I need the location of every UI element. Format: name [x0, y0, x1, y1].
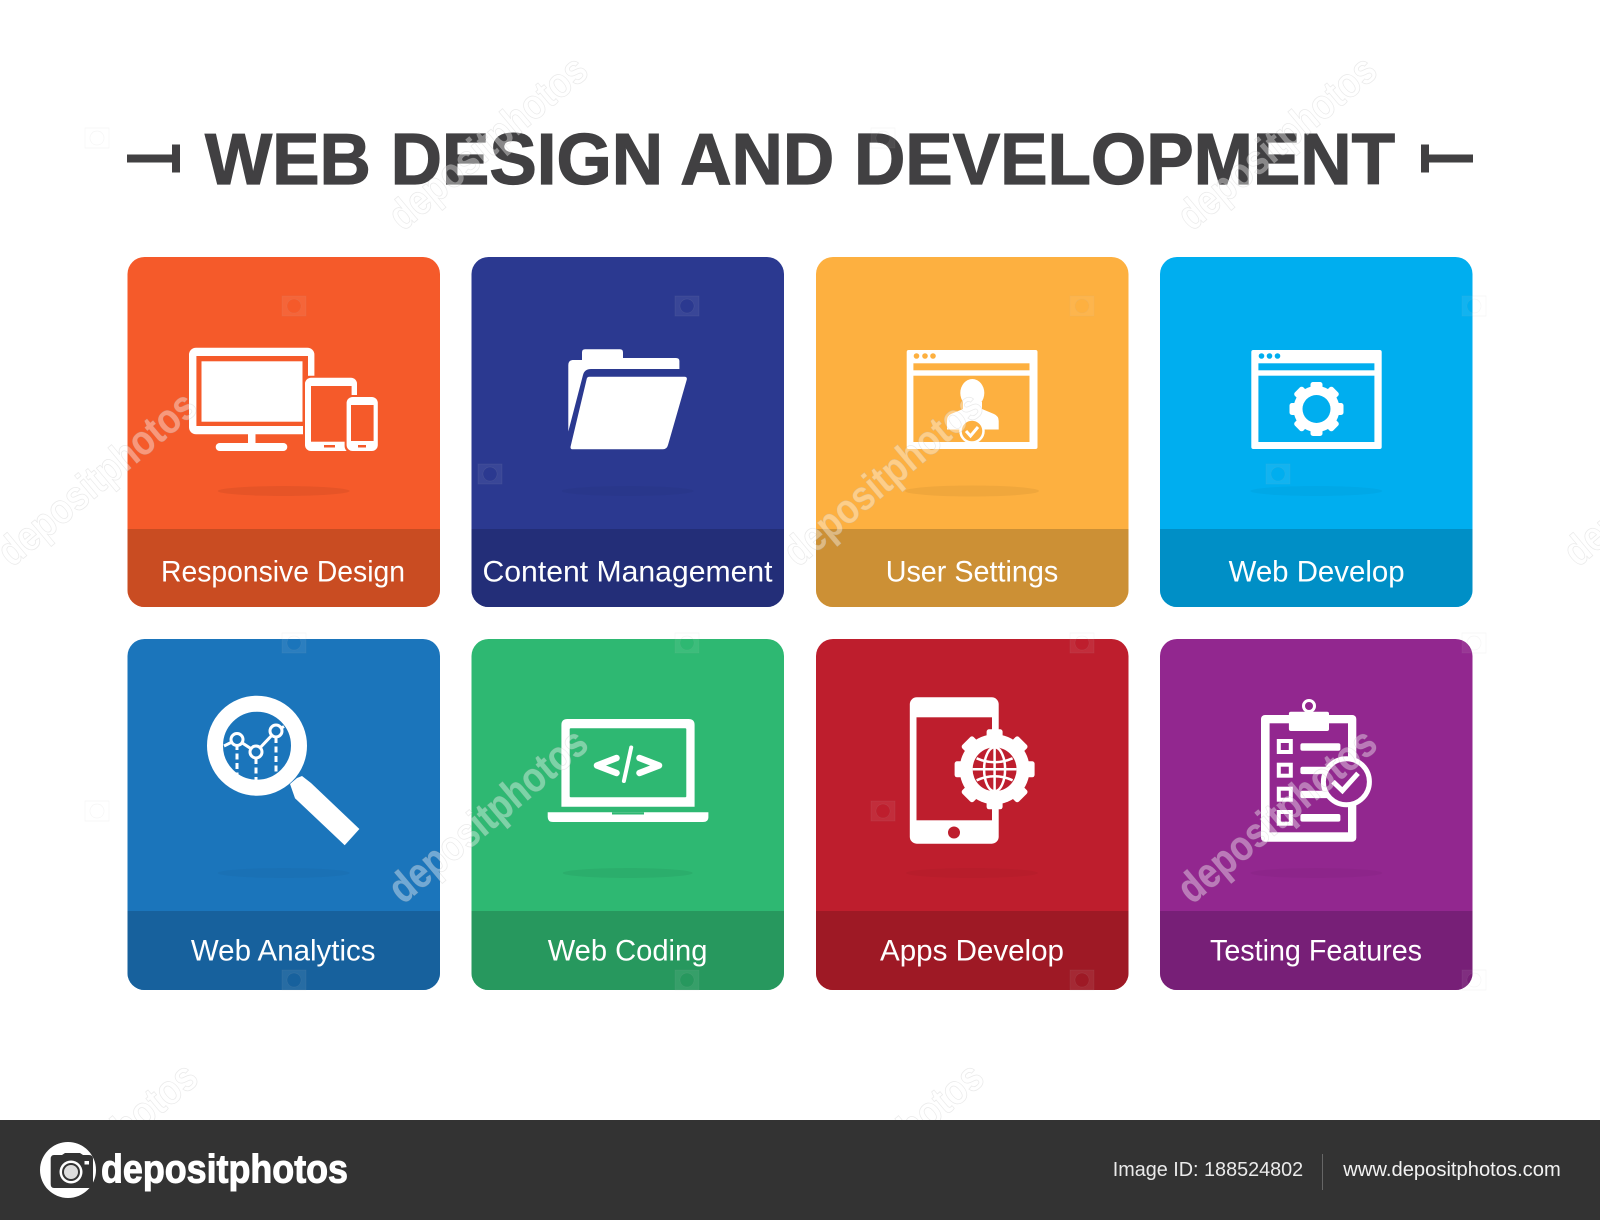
panel: Content Management	[472, 257, 784, 607]
panel: Testing Features	[1160, 639, 1472, 990]
watermarks: depositphotos	[379, 45, 596, 239]
icon: folder	[568, 349, 687, 449]
label: Web Develop	[1229, 556, 1405, 589]
label: User Settings	[886, 556, 1058, 589]
panel: Apps Develop	[816, 639, 1128, 990]
panel: Web Coding	[472, 639, 784, 990]
icon: camera logo	[40, 1142, 96, 1198]
label: Web Analytics	[191, 934, 376, 968]
panel: Responsive Design	[128, 257, 440, 607]
icon: browser window with user	[907, 350, 1038, 449]
watermarks: depositphotos	[774, 381, 991, 575]
footer bar	[0, 1120, 1600, 1220]
camera watermark marks	[85, 128, 1486, 990]
left title bracket	[127, 144, 180, 172]
right title bracket	[1421, 144, 1473, 172]
watermarks: depositphotos	[379, 718, 596, 912]
icon: phone with globe gear	[910, 697, 1035, 844]
label: Apps Develop	[880, 934, 1064, 968]
label: Responsive Design	[161, 556, 405, 589]
website url: www.depositphotos.com	[1342, 1158, 1561, 1181]
label: Web Coding	[548, 934, 707, 968]
label: Testing Features	[1210, 934, 1422, 968]
panel: Web Develop	[1160, 257, 1472, 607]
title	[127, 120, 1473, 200]
icon: laptop with code	[548, 719, 708, 822]
logo wordmark: depositphotos	[101, 1148, 348, 1192]
title text: WEB DESIGN AND DEVELOPMENT	[205, 120, 1395, 200]
image id: Image ID: 188524802	[1113, 1158, 1303, 1181]
watermarks: depositphotos	[1168, 718, 1385, 912]
watermarks: depositphotos	[1168, 45, 1385, 239]
icon: magnifier with chart	[215, 704, 359, 845]
panel: Web Analytics	[128, 639, 440, 990]
label: Content Management	[482, 556, 773, 589]
icon: browser window with gear	[1251, 350, 1382, 449]
icon: clipboard checklist	[1261, 700, 1369, 842]
icon: monitor, tablet and phone	[189, 348, 380, 453]
panel: User Settings	[816, 257, 1128, 607]
